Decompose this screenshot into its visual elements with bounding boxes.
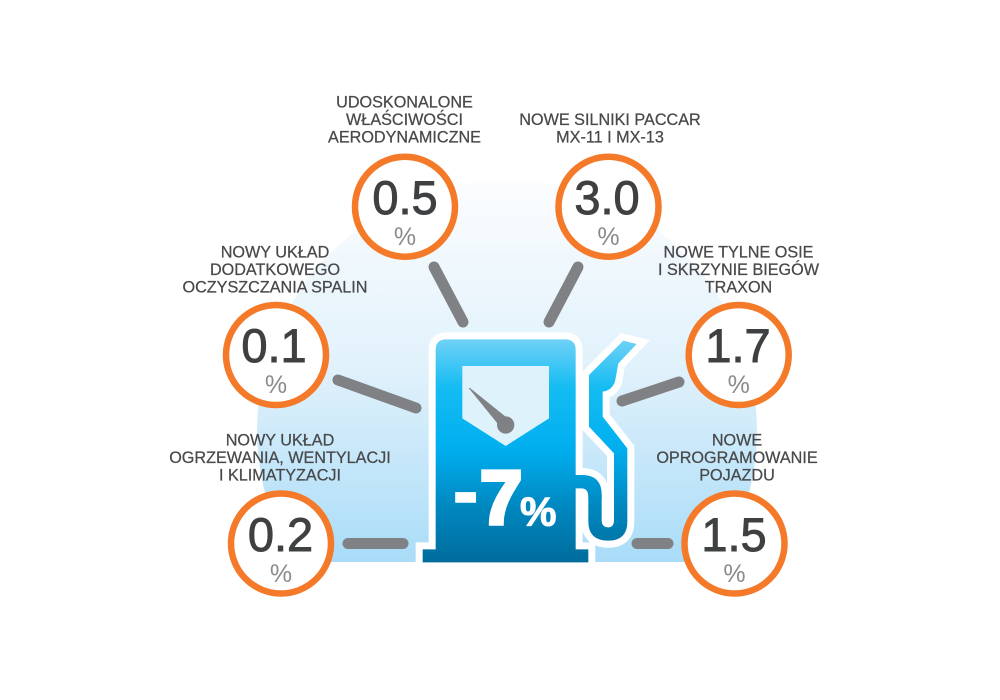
unit: % (270, 560, 292, 588)
label: NOWY UKŁAD (221, 244, 329, 262)
connector: axles (622, 382, 679, 401)
value: 1.7 (705, 319, 771, 372)
pump screen (462, 366, 549, 446)
hose connection (573, 475, 602, 500)
label: POJAZDU (699, 466, 775, 484)
item: engines (519, 111, 701, 257)
connector: software (637, 538, 668, 549)
connector: climate (348, 538, 403, 549)
unit: % (394, 223, 416, 251)
label: AERODYNAMICZNE (328, 128, 481, 146)
badge ring (231, 494, 331, 594)
percent sign: % (520, 488, 556, 534)
seven: 7 (480, 456, 522, 541)
badge ring (689, 305, 789, 405)
value: 3.0 (574, 171, 640, 224)
label: NOWE SILNIKI PACCAR (519, 111, 701, 129)
label: OGRZEWANIA, WENTYLACJI (169, 449, 391, 467)
pump hose and nozzle (573, 341, 637, 541)
item: aerodynamics (328, 94, 481, 257)
label: I KLIMATYZACJI (219, 466, 341, 484)
unit: % (265, 371, 287, 399)
badge ring (558, 157, 658, 257)
label: I SKRZYNIE BIEGÓW (658, 260, 820, 279)
connector: exhaust (338, 380, 416, 408)
gauge needle (469, 388, 514, 434)
label: NOWE (712, 432, 762, 450)
unit: % (723, 560, 746, 588)
badge ring (226, 305, 326, 405)
label: MX-11 I MX-13 (556, 128, 664, 146)
unit: % (597, 223, 620, 251)
value: 1.5 (701, 508, 767, 561)
label: OPROGRAMOWANIE (656, 449, 818, 467)
label: NOWY UKŁAD (226, 432, 334, 450)
item: climate (169, 432, 391, 594)
value: 0.1 (241, 319, 307, 372)
pump body (423, 339, 588, 562)
unit: % (728, 371, 750, 399)
background blob (257, 215, 757, 562)
badge ring (355, 157, 455, 257)
item: exhaust (182, 244, 368, 405)
value: 0.5 (372, 171, 438, 224)
label: DODATKOWEGO (210, 261, 340, 279)
connector: engines (549, 267, 578, 322)
item: axles (658, 244, 820, 405)
connector: aerodynamics (434, 267, 463, 322)
label: OCZYSZCZANIA SPALIN (182, 278, 368, 296)
badge ring (684, 494, 784, 594)
label: TRAXON (705, 278, 772, 296)
value: 0.2 (248, 508, 313, 561)
label: UDOSKONALONE (336, 94, 473, 112)
label: NOWE TYLNE OSIE (664, 244, 814, 262)
item: software (656, 432, 818, 594)
minus sign: - (453, 449, 478, 534)
label: WŁAŚCIWOŚCI (346, 110, 463, 129)
fuel pump icon (423, 339, 637, 562)
